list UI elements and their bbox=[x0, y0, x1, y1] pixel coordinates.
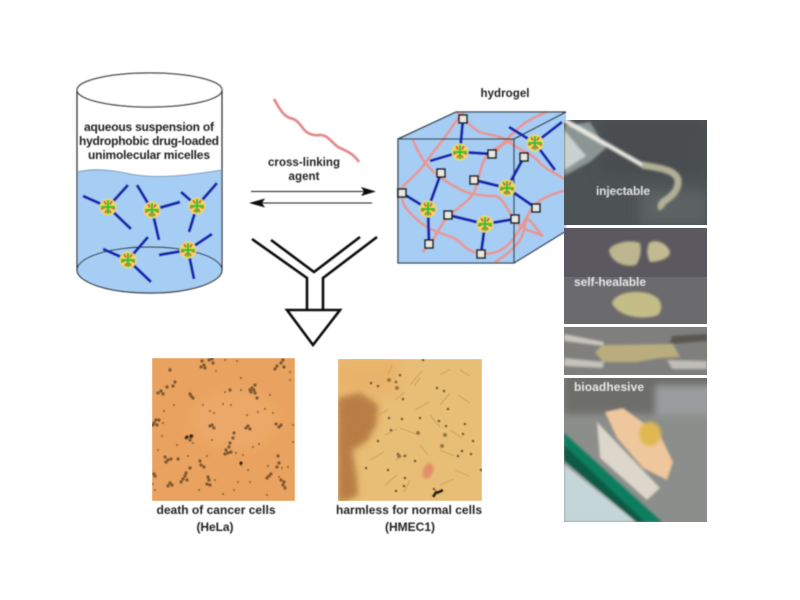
cube faces bbox=[398, 112, 566, 263]
bucket water bbox=[77, 170, 222, 293]
caption: normal cells: harmless for normal cells bbox=[336, 503, 482, 517]
cross-link nodes bbox=[398, 115, 540, 258]
cross-linking agent label: cross-linking bbox=[268, 157, 340, 169]
cross-linking agent label: agent bbox=[288, 171, 320, 183]
photo: self-healable bbox=[564, 228, 707, 324]
injectable label: injectable bbox=[596, 184, 650, 198]
water surface line bbox=[77, 170, 222, 177]
cube edges bbox=[398, 112, 566, 263]
bucket label bbox=[79, 120, 219, 162]
arrow: reverse reaction bbox=[249, 198, 372, 208]
polymer network bbox=[400, 112, 566, 262]
diagram: bucket of micelles bbox=[77, 73, 222, 293]
icon: cross-linking agent strand bbox=[274, 99, 359, 162]
caption: cancer cells: death of cancer cells bbox=[156, 503, 276, 517]
hydrogel heading: hydrogel bbox=[480, 88, 530, 100]
arrow: forward reaction bbox=[251, 187, 376, 196]
diagram: hydrogel cube bbox=[398, 112, 566, 263]
bucket label: hydrophobic drug-loaded bbox=[79, 134, 219, 148]
bucket label: aqueous suspension of bbox=[84, 120, 215, 134]
bioadhesive label: bioadhesive bbox=[574, 380, 644, 394]
micelle arms bbox=[402, 119, 562, 254]
bucket label: unimolecular micelles bbox=[88, 148, 210, 162]
photo: injectable bbox=[564, 120, 707, 225]
micrograph: cancer cells bbox=[152, 358, 295, 501]
photo: bioadhesive bbox=[564, 378, 707, 522]
caption: normal cells: (HMEC1) bbox=[385, 520, 435, 534]
caption: cancer cells: (HeLa) bbox=[196, 520, 234, 534]
bucket outline bbox=[77, 73, 222, 293]
arrow: antibody-shaped outcome arrow bbox=[252, 237, 377, 345]
caption: cancer cells bbox=[156, 503, 276, 534]
cross-linking agent label bbox=[268, 157, 340, 183]
micelles in suspension bbox=[83, 183, 217, 282]
micelles in gel bbox=[420, 134, 544, 232]
caption: normal cells bbox=[336, 503, 482, 534]
photo: stretched gel in forceps bbox=[564, 327, 707, 375]
micrograph: normal cells bbox=[338, 359, 482, 502]
self-healable label: self-healable bbox=[574, 275, 646, 289]
